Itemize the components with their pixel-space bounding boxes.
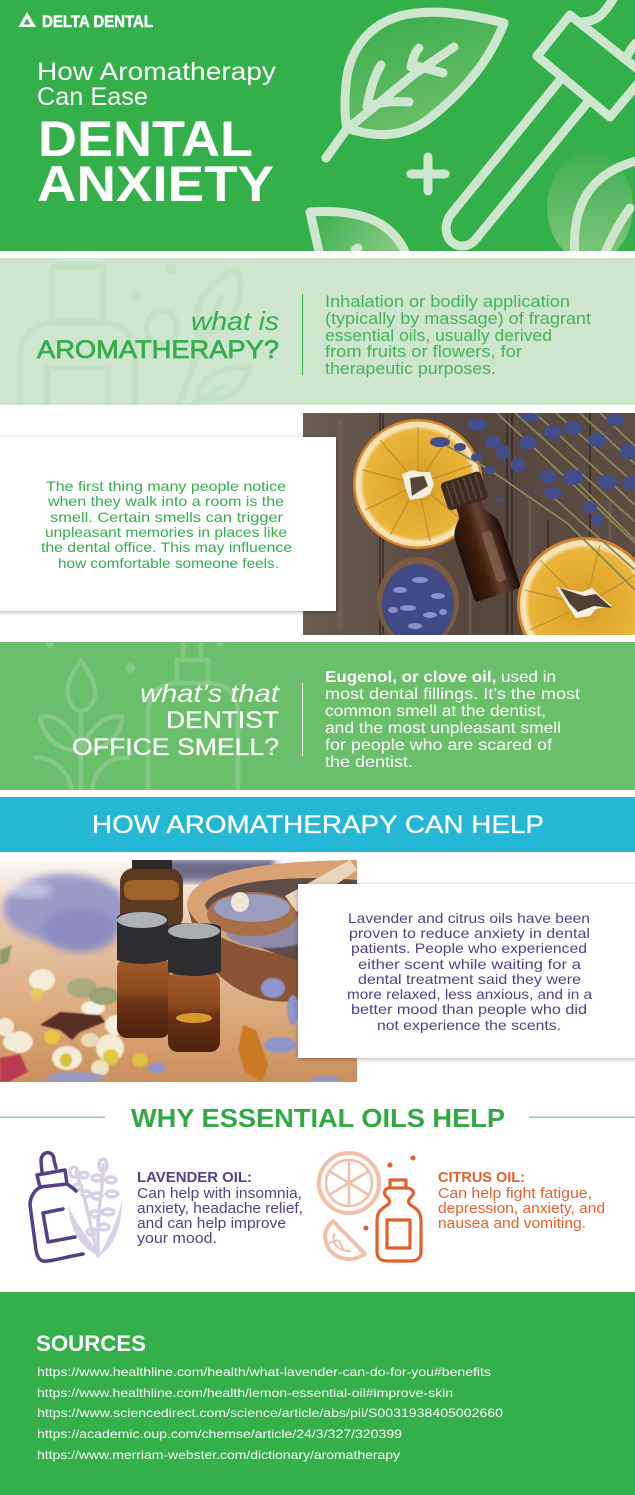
card: lavender and citrus research text: proven to reduce anxiety in dental — [349, 925, 590, 941]
heading: why essential oils help: WHY ESSENTIAL OILS HELP — [131, 1103, 505, 1133]
text block: eugenol: most dental fillings. It’s the most — [325, 686, 581, 703]
text block: source links: https://www.sciencedirect.com/science/article/abs/pii/S0031938405002660 — [37, 1406, 503, 1420]
wooden bowl — [187, 860, 357, 1002]
text block: eugenol: for people who are scared of — [325, 737, 553, 754]
panel: dentist office smell — [0, 640, 635, 795]
icon: lavender oil bottle — [30, 1153, 122, 1261]
text block: source links: https://www.healthline.com/health/lemon-essential-oil#improve-skin — [37, 1386, 453, 1400]
card: smell text — [0, 437, 336, 611]
text block: definition — [325, 293, 591, 378]
text block: lavender oil: your mood. — [137, 1231, 217, 1247]
logo: Delta Dental: DELTA DENTAL — [42, 13, 153, 31]
heading: what's that dentist office smell: DENTIST — [166, 707, 279, 734]
text block: source links: https://www.healthline.com/health/what-lavender-can-do-for-you#benefits — [37, 1365, 491, 1379]
card: smell text: The first thing many people notice — [46, 478, 286, 494]
title — [37, 58, 277, 212]
icon: leaf, dropper and plus — [310, 0, 635, 262]
heading: what is aromatherapy: what is — [191, 306, 279, 336]
scattered flowers — [0, 945, 339, 1082]
amber bottle — [437, 470, 521, 602]
text block: definition: from fruits or flowers, for — [325, 343, 523, 361]
background icon: bottle and leaves — [20, 264, 250, 410]
background icon: plant and bottle — [33, 640, 238, 795]
panel: what is aromatherapy — [0, 258, 635, 410]
card: lavender and citrus research text: Lavender and citrus oils have been — [348, 910, 590, 926]
heading: sources: SOURCES — [36, 1331, 146, 1356]
back bottle — [120, 868, 183, 930]
card: smell text: unpleasant memories in places like — [45, 524, 287, 540]
text block: lavender oil: LAVENDER OIL: — [137, 1170, 252, 1186]
card: lavender and citrus research text: not experience the scents. — [377, 1017, 561, 1033]
lavender blur — [3, 874, 127, 942]
heading: what's that dentist office smell: OFFICE SMELL? — [72, 734, 279, 761]
card: lavender and citrus research text — [298, 884, 635, 1058]
title: ANXIETY — [37, 156, 274, 212]
card: lavender and citrus research text: more relaxed, less anxious, and in a — [347, 986, 592, 1002]
panel: sources — [0, 1292, 635, 1495]
text block: definition: Inhalation or bodily application — [325, 293, 570, 311]
text block: citrus oil: nausea and vomiting. — [438, 1216, 586, 1232]
text block: citrus oil: Can help fight fatigue, — [438, 1186, 592, 1202]
text block: lavender oil: anxiety, headache relief, — [137, 1201, 303, 1217]
card: smell text: smell. Certain smells can trigger — [50, 509, 283, 525]
long lavender stems — [440, 413, 635, 590]
photo: orange slices, bottle and lavender — [303, 413, 635, 635]
heading: what's that dentist office smell — [72, 680, 280, 761]
card: lavender and citrus research text: patients. People who experienced — [351, 940, 587, 956]
card: lavender and citrus research text: dental treatment said they were — [358, 971, 581, 987]
text block: definition: essential oils, usually derived — [325, 327, 552, 345]
text block: eugenol: Eugenol, or clove oil, used in — [325, 669, 556, 686]
lavender sprigs — [430, 413, 635, 526]
icon: citrus slices and bottle — [319, 1153, 421, 1261]
spoon of lavender — [377, 557, 459, 635]
text block: lavender oil — [137, 1170, 303, 1247]
photo: amber bottles and dried flowers — [0, 858, 357, 1082]
text block: citrus oil: depression, anxiety, and — [438, 1201, 605, 1217]
heading: what is aromatherapy — [37, 306, 279, 364]
heading: what is aromatherapy: AROMATHERAPY? — [37, 336, 279, 364]
card: lavender and citrus research text: either scent while waiting for a — [358, 956, 581, 972]
banner: how aromatherapy can help — [0, 797, 635, 852]
text block: eugenol: and the most unpleasant smell — [325, 720, 561, 737]
banner: how aromatherapy can help: HOW AROMATHERAPY CAN HELP — [92, 811, 544, 839]
orange slice right — [517, 537, 635, 635]
text block: eugenol: common smell at the dentist, — [325, 703, 546, 720]
amber bottles — [117, 912, 221, 1052]
card: smell text: how comfortable someone feels. — [58, 555, 279, 571]
heading: what's that dentist office smell: what’s that — [140, 680, 280, 708]
text block: source links: https://www.merriam-webster.com/dictionary/aromatherapy — [37, 1448, 400, 1462]
card: lavender and citrus research text: better mood than people who did — [351, 1001, 587, 1017]
orange slice left — [353, 419, 483, 549]
card: smell text: when they walk into a room is the — [47, 493, 284, 509]
text block: source links: https://academic.oup.com/chemse/article/24/3/327/320399 — [37, 1427, 402, 1441]
text block: lavender oil: Can help with insomnia, — [137, 1186, 302, 1202]
text block: eugenol — [325, 669, 581, 771]
title: DENTAL — [38, 111, 253, 167]
text block: lavender oil: and can help improve — [137, 1216, 286, 1232]
card: smell text: the dental office. This may influence — [41, 539, 292, 555]
panel: header — [0, 0, 635, 262]
text block: citrus oil: CITRUS OIL: — [438, 1170, 525, 1186]
text block: eugenol: the dentist. — [325, 754, 413, 771]
text block: citrus oil — [438, 1170, 605, 1232]
text block: definition: (typically by massage) of fragrant — [325, 310, 591, 328]
title: How Aromatherapy — [37, 58, 277, 86]
title: Can Ease — [37, 83, 148, 111]
text block: source links — [37, 1365, 503, 1462]
text block: definition: therapeutic purposes. — [325, 360, 496, 378]
